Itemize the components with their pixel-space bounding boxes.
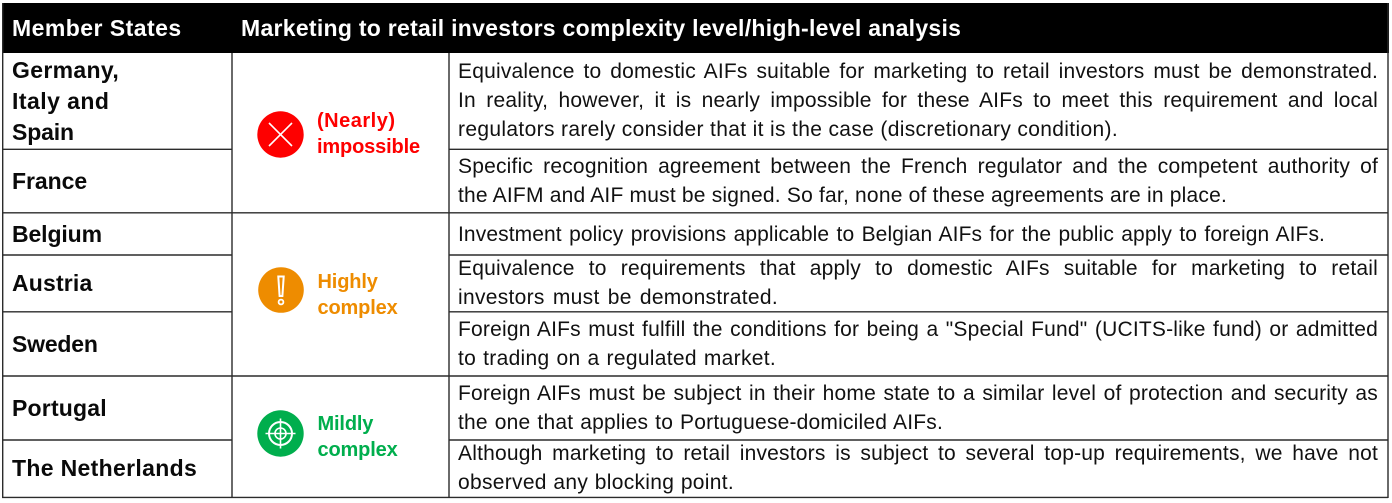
description: Sweden: [458, 318, 1378, 370]
state: Austria: Austria: [12, 270, 92, 296]
description: Portugal: [458, 382, 1378, 434]
complexity: mildly complex: [257, 410, 398, 461]
state: Germany, Italy and Spain: [12, 57, 119, 145]
label: Mildly complex: complex: [318, 439, 398, 461]
icon: orange exclamation: [258, 267, 304, 313]
label: (Nearly) impossible: [317, 110, 420, 158]
member states column: [12, 57, 197, 481]
state: Sweden: Sweden: [12, 331, 98, 357]
description: Austria: [458, 257, 1378, 309]
description: Germany, Italy and Spain: [458, 60, 1378, 141]
state: Portugal: Portugal: [12, 395, 107, 421]
label: (Nearly) impossible: impossible: [317, 136, 420, 158]
description: Portugal: the one that applies to Portuguese-domiciled AIFs.: [458, 411, 943, 434]
description: Germany, Italy and Spain: Equivalence to domestic AIFs suitable for marketing to retail investors must be demonstrated.: [458, 60, 1378, 83]
label: Mildly complex: Mildly: [318, 413, 373, 435]
state: Germany, Italy and Spain: Italy and: [12, 88, 109, 114]
state: Germany, Italy and Spain: Spain: [12, 119, 74, 145]
description: Austria: investors must be demonstrated.: [458, 286, 778, 309]
description: Germany, Italy and Spain: In reality, however, it is nearly impossible for these AIFs to meet this requirement and local: [458, 89, 1378, 112]
description: The Netherlands: observed any blocking point.: [458, 471, 734, 494]
description: Sweden: to trading on a regulated market.: [458, 347, 776, 370]
complexity: highly complex: [258, 267, 398, 319]
header bar: [3, 3, 1389, 53]
description: France: Specific recognition agreement between the French regulator and the competent authority of: [458, 155, 1378, 178]
description: Belgium: Investment policy provisions applicable to Belgian AIFs for the public apply to foreign AIFs.: [458, 223, 1325, 246]
state: The Netherlands: The Netherlands: [12, 455, 197, 481]
label: Mildly complex: [318, 413, 398, 461]
header: analysis title: Marketing to retail investors complexity level/high-level analysis: [241, 15, 961, 41]
state: Germany, Italy and Spain: Germany,: [12, 57, 119, 83]
label: Highly complex: Highly: [318, 271, 378, 293]
label: Highly complex: complex: [318, 297, 398, 319]
label: Highly complex: [318, 271, 398, 319]
label: (Nearly) impossible: (Nearly): [317, 110, 395, 132]
description: Germany, Italy and Spain: regulators rarely consider that it is the case (discretionary condition).: [458, 118, 1118, 141]
icon: green target: [257, 410, 304, 457]
description: France: the AIFM and AIF must be signed. So far, none of these agreements are in place.: [458, 184, 1227, 207]
description: The Netherlands: [458, 442, 1378, 494]
description: France: [458, 155, 1378, 207]
description: Sweden: Foreign AIFs must fulfill the conditions for being a "Special Fund" (UCITS-like fund) or admitted: [458, 318, 1378, 341]
description: The Netherlands: Although marketing to retail investors is subject to several top-up requirements, we have not: [458, 442, 1378, 465]
state: Belgium: Belgium: [12, 221, 102, 247]
state: France: France: [12, 168, 87, 194]
description: Austria: Equivalence to requirements that apply to domestic AIFs suitable for marketing to retail: [458, 257, 1378, 280]
icon: red cross: [257, 111, 304, 158]
description: Portugal: Foreign AIFs must be subject in their home state to a similar level of protection and security as: [458, 382, 1378, 405]
header: member states: Member States: [12, 15, 182, 41]
complexity: nearly impossible: [257, 110, 420, 158]
